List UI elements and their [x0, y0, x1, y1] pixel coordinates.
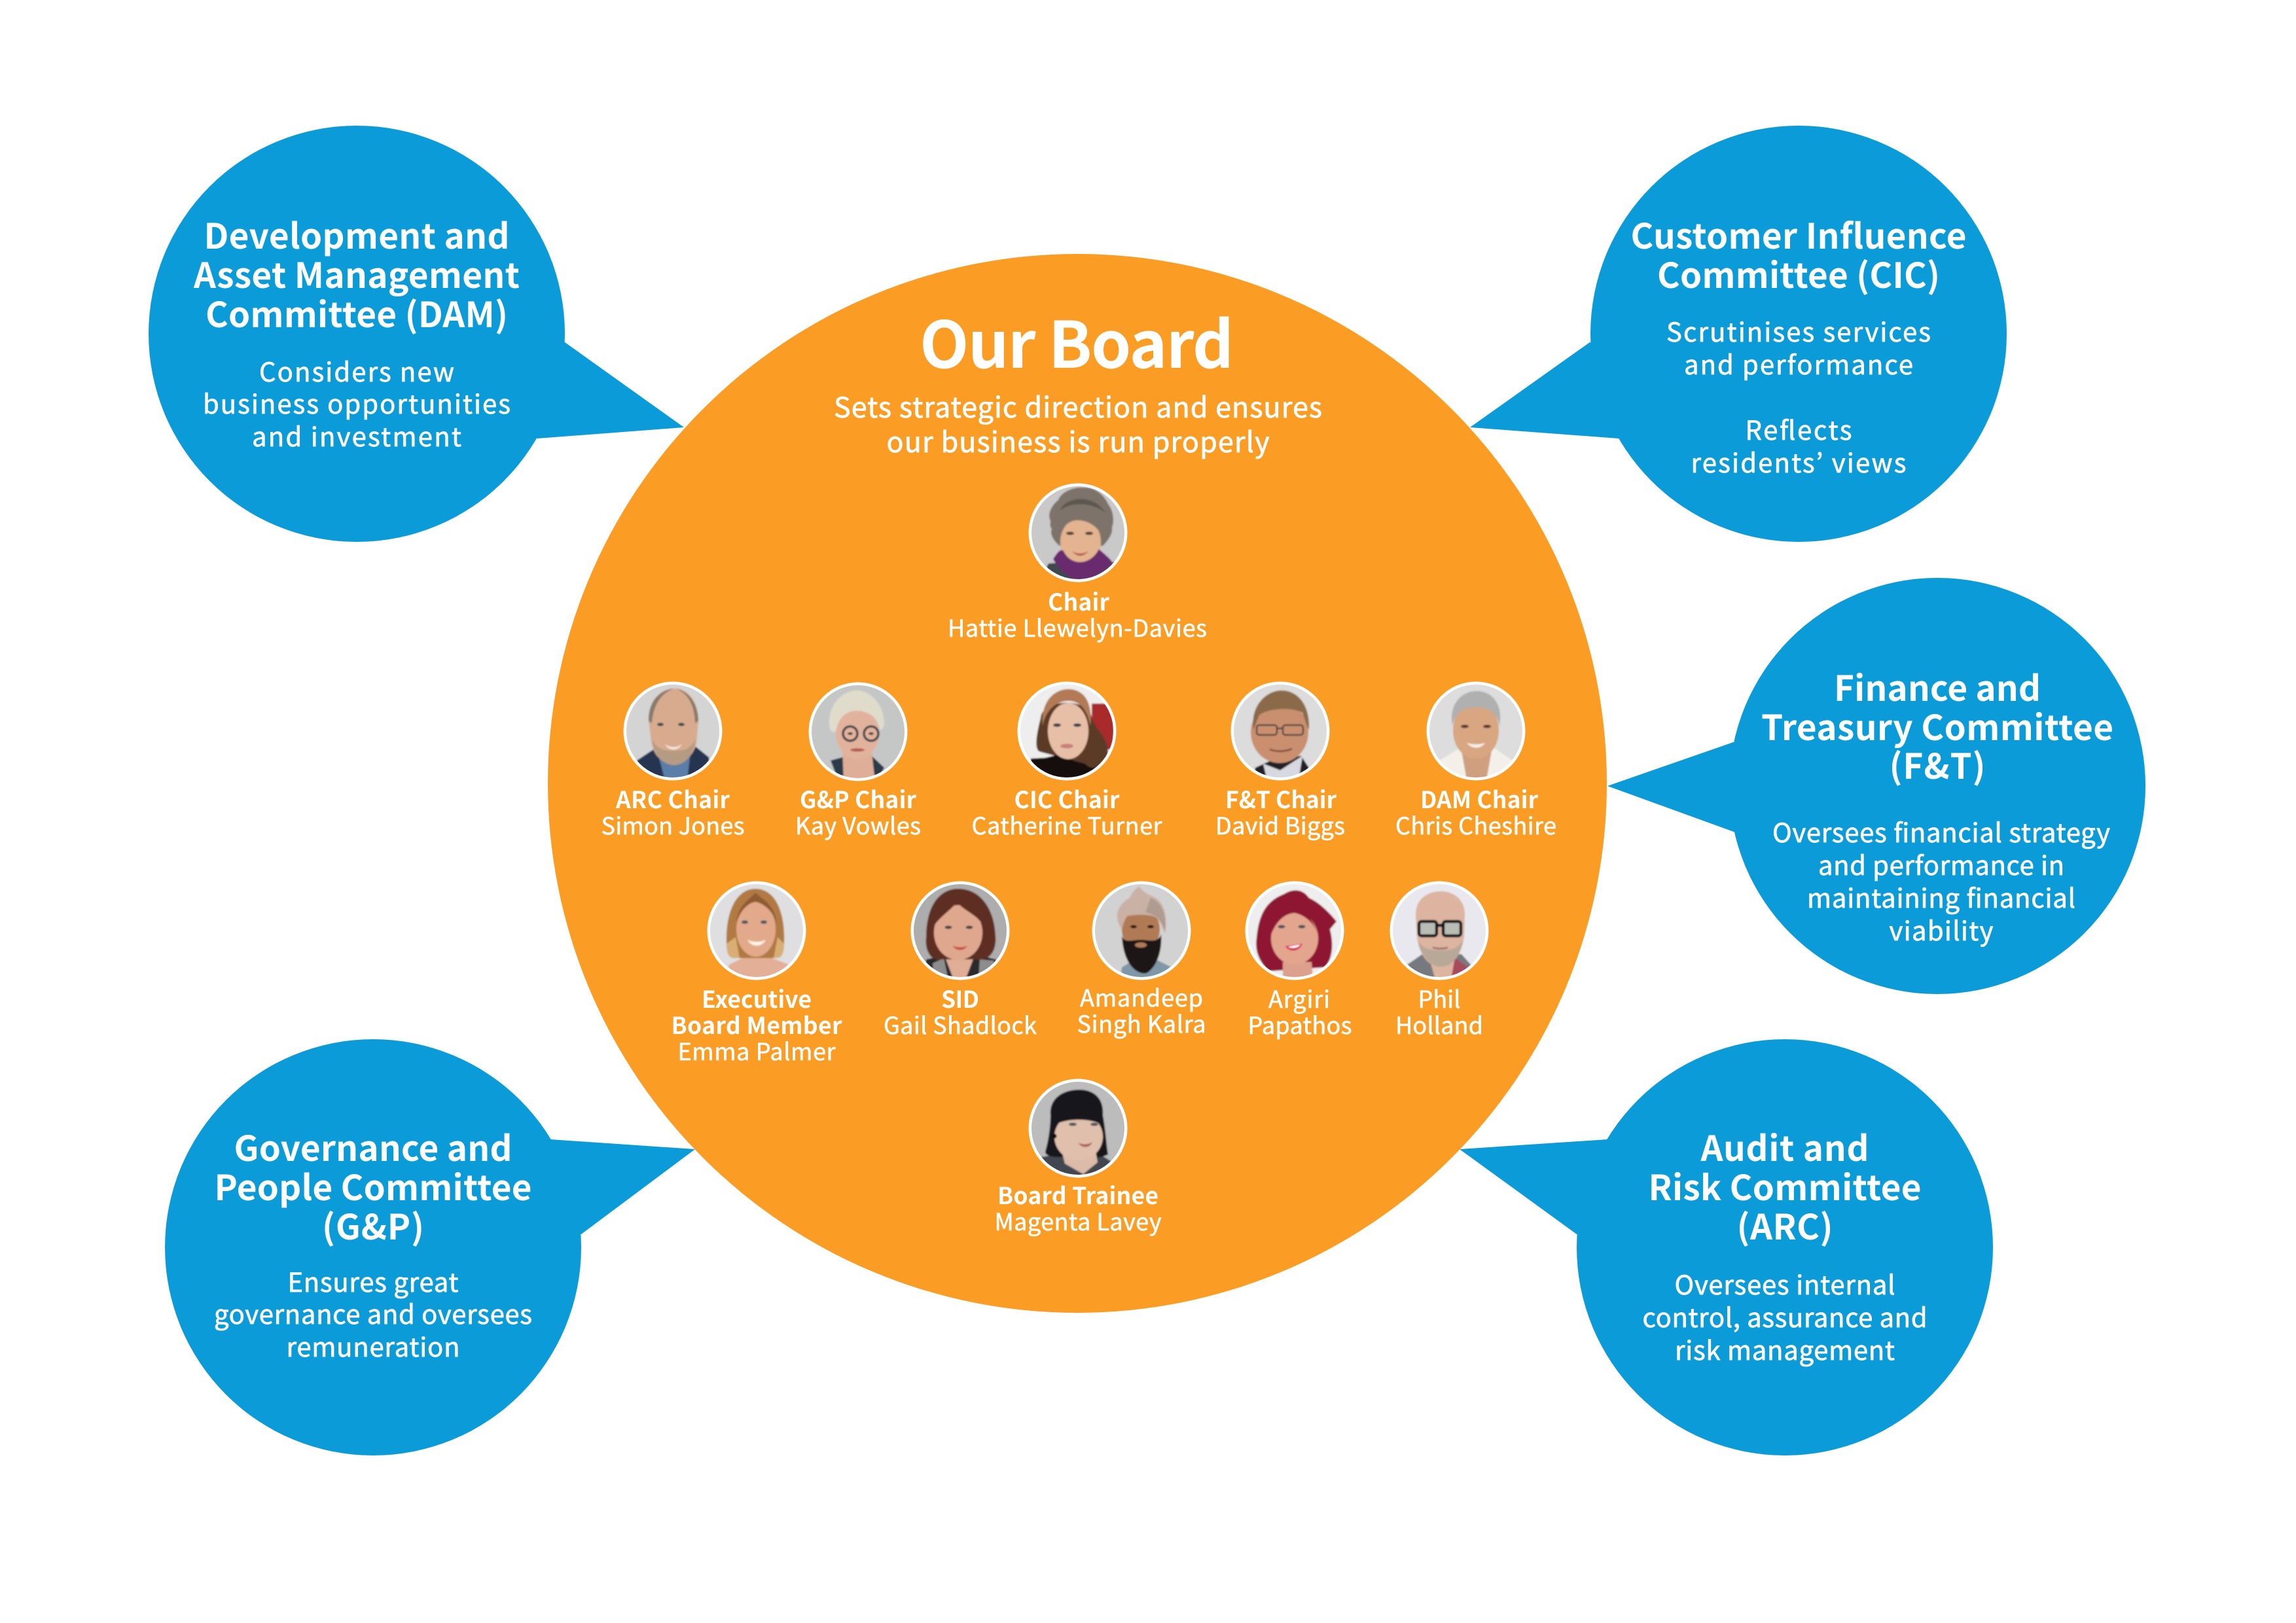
label: [601, 782, 745, 842]
label: Simon Jones: [601, 808, 745, 842]
committee description: [214, 1262, 532, 1364]
label: CIC Chair: [1014, 782, 1120, 815]
portrait: [707, 881, 806, 980]
label: [948, 584, 1207, 644]
committee description: [1643, 1264, 1927, 1368]
label: SID: [941, 982, 979, 1015]
label: [884, 982, 1037, 1041]
member: Executive Board Member Emma Palmer: [672, 881, 842, 1067]
committee description: Scrutinises services: [1666, 312, 1931, 349]
committee description: Reflects: [1745, 410, 1852, 448]
label: DAM Chair: [1420, 782, 1539, 815]
panel: Governance and People Committee: [165, 1039, 695, 1455]
speech bubble shape: [1607, 578, 2145, 994]
committee description: Ensures great: [288, 1262, 458, 1300]
portrait: [1029, 483, 1127, 582]
member: Chair Hattie Llewelyn-Davies: [948, 483, 1207, 644]
label: [1247, 981, 1352, 1041]
subtitle: Sets strategic direction and ensures: [834, 385, 1322, 426]
member: SID Gail Shadlock: [884, 881, 1037, 1041]
committee description: and investment: [252, 416, 461, 454]
panel: Finance and Treasury Committee: [1607, 578, 2145, 994]
committee heading: (F&T): [1889, 740, 1986, 789]
committee description: and performance: [1684, 344, 1913, 382]
committee heading: (ARC): [1737, 1200, 1833, 1250]
committee heading: [1631, 209, 1966, 298]
member: Phil Holland: [1390, 881, 1488, 1041]
label: [1215, 782, 1345, 842]
committee description: business opportunities: [203, 383, 511, 421]
label: Catherine Turner: [971, 808, 1163, 842]
portrait: [1017, 682, 1117, 780]
label: Gail Shadlock: [884, 1007, 1037, 1041]
member: G&P Chair Kay Vowles: [795, 682, 921, 842]
committee heading: Development and: [204, 209, 509, 259]
orange circle: [548, 254, 1607, 1313]
label: Phil: [1418, 981, 1461, 1015]
committee description: Oversees financial strategy: [1772, 812, 2110, 850]
member: Amandeep Singh Kalra: [1077, 881, 1206, 1040]
label: [1395, 782, 1556, 842]
label: Magenta Lavey: [995, 1204, 1162, 1238]
portrait: [623, 682, 723, 780]
label: Board Trainee: [997, 1178, 1158, 1211]
label: ARC Chair: [615, 782, 730, 815]
portrait: [911, 881, 1009, 980]
label: [672, 982, 842, 1067]
committee heading: People Committee: [215, 1161, 531, 1211]
committee heading: Committee (CIC): [1657, 249, 1940, 298]
label: Argiri: [1268, 981, 1330, 1015]
member: Board Trainee Magenta Lavey: [995, 1079, 1162, 1238]
portrait: [1230, 682, 1330, 780]
speech bubble shape: [1460, 1039, 1993, 1455]
title: Our Board: [920, 294, 1234, 387]
label: Board Member: [672, 1008, 842, 1041]
member: ARC Chair Simon Jones: [601, 682, 745, 842]
committee description: Oversees internal: [1674, 1264, 1895, 1302]
committee heading: Governance and: [234, 1122, 512, 1171]
speech bubble shape: [165, 1039, 695, 1455]
portrait: [1245, 881, 1344, 980]
subtitle: [834, 385, 1322, 461]
label: Chair: [1048, 584, 1110, 618]
panel: Customer Influence Committee: [1470, 126, 2007, 542]
panel: Development and Asset Management Committee: [149, 126, 684, 542]
committee description: [203, 351, 511, 454]
committee heading: Finance and: [1834, 662, 2041, 711]
label: [1395, 981, 1483, 1041]
member: Argiri Papathos: [1245, 881, 1352, 1041]
committee description: remuneration: [287, 1327, 459, 1364]
committee heading: [1761, 662, 2113, 789]
label: Singh Kalra: [1077, 1006, 1206, 1040]
committee heading: Treasury Committee: [1761, 701, 2113, 751]
committee description: maintaining financial: [1807, 878, 2075, 916]
committee heading: Committee (DAM): [206, 288, 508, 338]
portrait: [1029, 1079, 1127, 1178]
label: Executive: [702, 982, 812, 1015]
committee description: viability: [1889, 910, 1994, 948]
label: Papathos: [1247, 1007, 1352, 1041]
label: Kay Vowles: [795, 808, 921, 842]
committee heading: [1648, 1122, 1922, 1250]
portrait: [1390, 881, 1488, 980]
committee heading: [215, 1122, 531, 1250]
committee heading: Audit and: [1700, 1122, 1869, 1171]
label: F&T Chair: [1225, 782, 1337, 815]
committee description: residents’ views: [1691, 442, 1906, 480]
member: DAM Chair Chris Cheshire: [1395, 682, 1556, 842]
committee description: Considers new: [259, 351, 454, 389]
panel: Our Board central circle: [548, 254, 1607, 1313]
committee heading: Customer Influence: [1631, 209, 1966, 259]
label: Hattie Llewelyn-Davies: [948, 610, 1207, 644]
committee description: [1772, 812, 2110, 948]
panel: Audit and Risk Committee: [1460, 1039, 1993, 1455]
committee description: [1666, 312, 1931, 480]
member: F&T Chair David Biggs: [1215, 682, 1345, 842]
committee heading: Risk Committee: [1648, 1161, 1922, 1211]
label: Holland: [1395, 1007, 1483, 1041]
label: David Biggs: [1215, 808, 1345, 842]
portrait: [1092, 881, 1191, 980]
speech bubble shape: [1470, 126, 2007, 542]
committee heading: (G&P): [322, 1200, 424, 1250]
label: Emma Palmer: [678, 1033, 836, 1067]
committee description: control, assurance and: [1643, 1297, 1927, 1335]
committee description: risk management: [1675, 1330, 1895, 1368]
portrait: [809, 682, 907, 781]
committee description: governance and oversees: [214, 1294, 532, 1332]
label: [995, 1178, 1162, 1238]
label: [971, 782, 1163, 842]
committee heading: [193, 209, 520, 338]
speech bubble shape: [149, 126, 684, 542]
committee description: and performance in: [1818, 845, 2064, 883]
member: CIC Chair Catherine Turner: [971, 682, 1163, 842]
portrait: [1427, 682, 1525, 780]
committee heading: Asset Management: [193, 249, 520, 298]
label: [1077, 980, 1206, 1040]
label: Amandeep: [1080, 980, 1203, 1014]
subtitle: our business is run properly: [886, 420, 1270, 461]
label: G&P Chair: [800, 782, 917, 815]
label: [795, 782, 921, 842]
label: Chris Cheshire: [1395, 808, 1556, 842]
